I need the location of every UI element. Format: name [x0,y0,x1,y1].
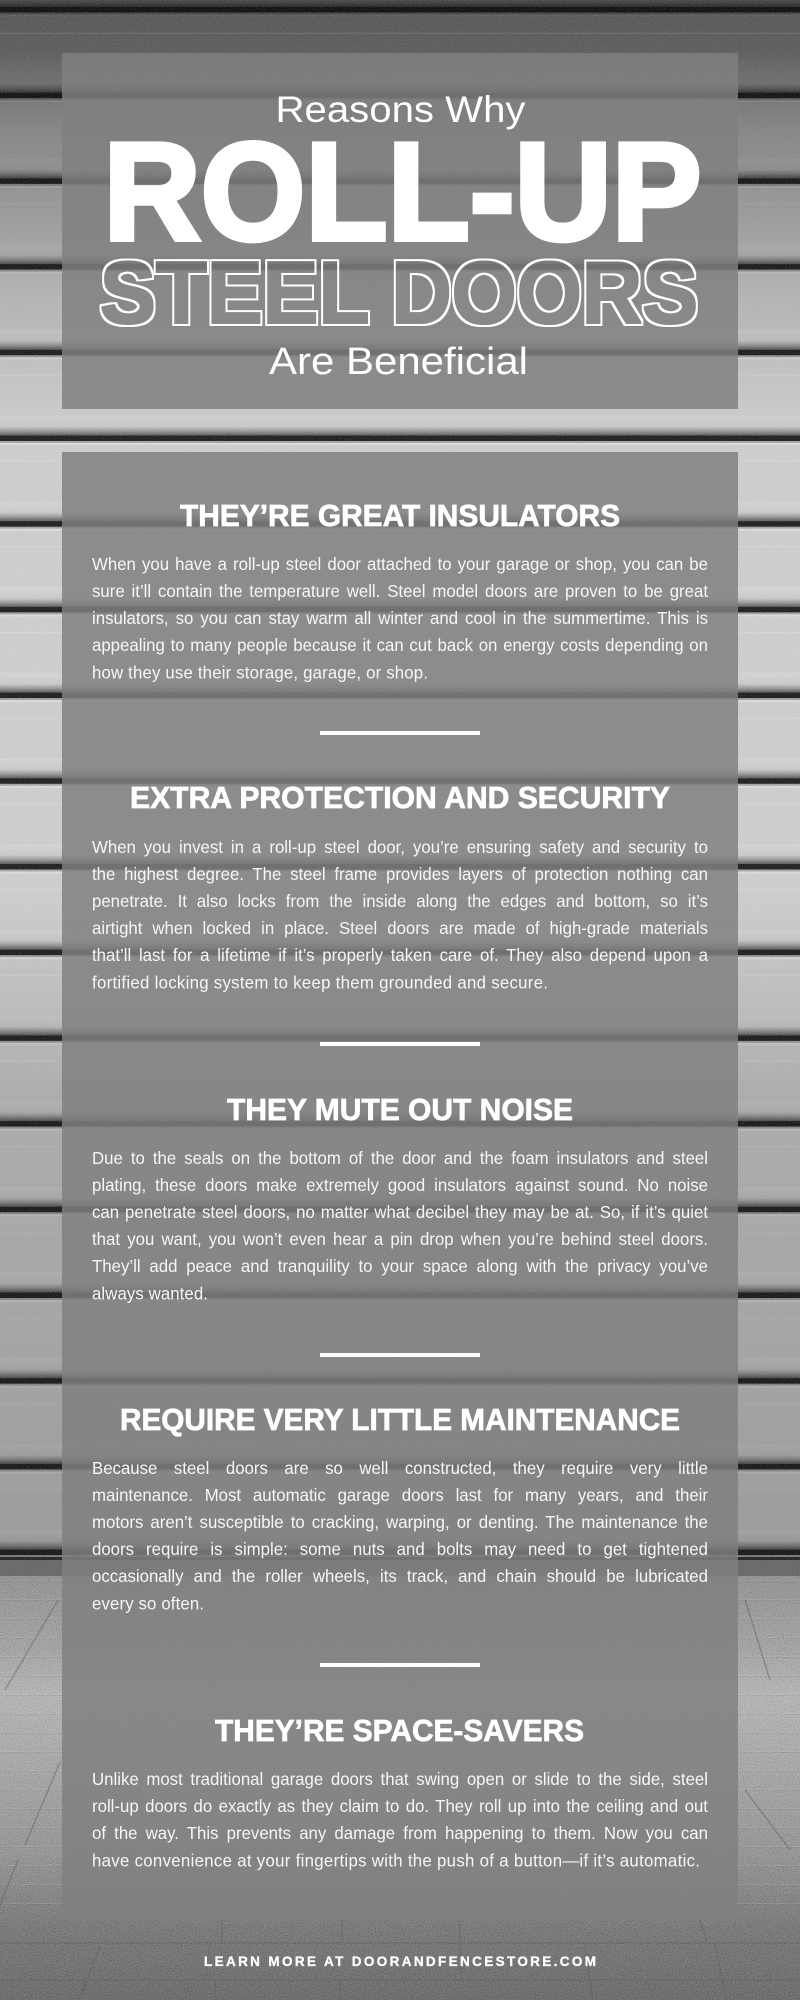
text: protection: the highest degree. The steel frame provides layers of protection nothing can [92,864,708,884]
text: space savers: roll-up doors do exactly as they claim to do. They roll up into the ceiling and out [92,1796,708,1816]
text: space savers: have convenience at your fingertips with the push of a button—if it’s automatic. [92,1850,700,1871]
text: noise: that you want, you won’t even hear a pin drop when you’re behind steel doors. [92,1229,708,1249]
title line: STEEL DOORS outlined: STEEL DOORS [100,243,698,342]
text: insulators [92,554,708,683]
text: protection: When you invest in a roll-up steel door, you’re ensuring safety and security to [92,837,708,857]
text: maintenance: maintenance. Most automatic garage doors last for many years, and their [92,1485,708,1505]
text: maintenance: every so often. [92,1593,204,1614]
text: insulators: sure it’ll contain the temperature well. Steel model doors are proven to be great [92,581,708,601]
text: maintenance: motors aren’t susceptible to cracking, warping, or denting. The maintenance the [92,1512,708,1532]
text: maintenance: occasionally and the roller wheels, its track, and chain should be lubricated [92,1566,708,1586]
text: protection: that’ll last for a lifetime if it’s properly taken care of. They also depend upon a [92,945,708,965]
text: noise: They’ll add peace and tranquility to your space along with the privacy you’ve [92,1256,708,1276]
text: maintenance: Because steel doors are so well constructed, they require very little [92,1458,708,1478]
heading: insulators: THEY’RE GREAT INSULATORS [180,498,620,533]
text: protection: fortified locking system to keep them grounded and secure. [92,972,548,993]
text: noise [92,1148,708,1304]
heading: protection: EXTRA PROTECTION AND SECURITY [130,780,670,815]
text: noise: can penetrate steel doors, no matter what decibel they may be at. So, if it’s quiet [92,1202,708,1222]
panel: reasons [62,452,738,1920]
title line: ROLL-UP: ROLL-UP [104,114,702,270]
text: maintenance [92,1458,708,1614]
text: insulators: appealing to many people because it can cut back on energy costs depending on [92,635,708,655]
title line: Reasons Why: Reasons Why [276,89,526,130]
text: noise: Due to the seals on the bottom of the door and the foam insulators and steel [92,1148,708,1168]
text: noise: always wanted. [92,1283,208,1304]
text: protection: penetrate. It also locks from the inside along the edges and bottom, so it’s [92,891,708,911]
heading: noise: THEY MUTE OUT NOISE [227,1092,573,1127]
heading: space savers: THEY’RE SPACE-SAVERS [215,1713,584,1748]
text: space savers: Unlike most traditional garage doors that swing open or slide to the side, steel [92,1769,708,1789]
text: insulators: insulators, so you can stay warm all winter and cool in the summertime. This is [92,608,708,628]
title [100,89,702,383]
text: space savers [92,1769,708,1871]
text: maintenance: doors require is simple: some nuts and bolts may need to get tightened [92,1539,708,1559]
text: insulators: how they use their storage, garage, or shop. [92,662,428,683]
footer: source link: LEARN MORE AT DOORANDFENCESTORE.COM [204,1954,596,1969]
text: protection: airtight when locked in place. Steel doors are made of high-grade materials [92,918,708,938]
text: protection [92,837,708,993]
panel: title [62,53,738,409]
text: insulators: When you have a roll-up steel door attached to your garage or shop, you can be [92,554,708,574]
heading: maintenance: REQUIRE VERY LITTLE MAINTENANCE [120,1402,680,1437]
title line: Are Beneficial: Are Beneficial [269,341,528,383]
text: noise: plating, these doors make extremely good insulators against sound. No noise [92,1175,708,1195]
text: space savers: of the way. This prevents any damage from happening to them. Now you can [92,1823,708,1843]
